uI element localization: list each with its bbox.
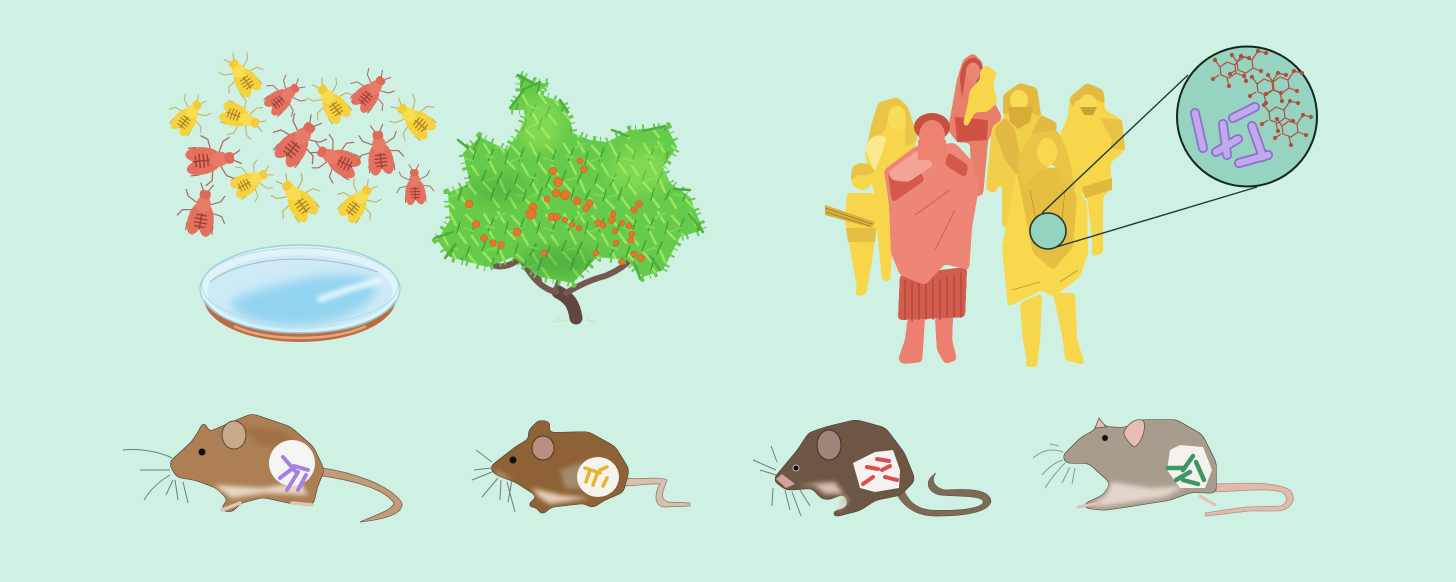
body	[1062, 418, 1216, 510]
whiskers	[123, 449, 188, 503]
person: front woman in yellow	[1002, 130, 1088, 367]
belly shading	[1090, 482, 1185, 506]
peach tree	[430, 70, 710, 322]
panel: human group	[825, 53, 1125, 367]
molecules	[1212, 50, 1312, 146]
eye	[1102, 435, 1108, 441]
tail	[625, 478, 690, 507]
whiskers	[472, 450, 515, 512]
whiskers	[1033, 444, 1075, 488]
gut patch	[853, 450, 900, 492]
tail	[1205, 483, 1293, 516]
tail	[322, 468, 402, 522]
zoom lines	[1042, 75, 1257, 248]
mouse 2	[472, 420, 690, 517]
gut patch	[577, 457, 619, 497]
tree trunk and branches	[496, 255, 632, 318]
person: bearded man	[986, 83, 1057, 227]
eye	[510, 456, 516, 464]
mouse 3	[753, 420, 991, 517]
petri dish	[200, 245, 400, 342]
person: man with curly hair	[1059, 83, 1125, 257]
feet	[1078, 496, 1215, 507]
ear	[817, 430, 841, 460]
person: front woman in red robe	[884, 113, 979, 364]
feet	[222, 503, 312, 510]
bacteria	[585, 467, 607, 486]
body	[773, 420, 915, 517]
magnified microbiome circle	[1177, 46, 1317, 186]
panel: fruit flies swarm	[160, 44, 446, 241]
tail	[896, 473, 991, 516]
nose	[776, 474, 795, 488]
belly and flank shading	[495, 470, 590, 504]
person: back-left woman	[865, 97, 918, 282]
canopy fringe	[437, 75, 703, 283]
bacteria	[863, 459, 897, 484]
peaches	[465, 158, 645, 265]
small gut circle	[1030, 213, 1066, 249]
gut patch	[269, 440, 315, 486]
body	[169, 414, 324, 512]
belly and back shading	[214, 482, 308, 498]
eye	[793, 465, 799, 471]
grass	[552, 313, 596, 322]
bacteria	[1168, 456, 1204, 484]
mouse 4	[1033, 418, 1293, 516]
person: woman with baby in red	[948, 53, 1002, 197]
mouse 1	[123, 414, 402, 522]
bacteria	[1195, 107, 1268, 163]
canopy leaf texture	[440, 79, 700, 279]
gut patch	[1167, 445, 1212, 488]
person: child with bundle	[825, 163, 877, 296]
leaf tips	[435, 75, 703, 278]
ear	[532, 436, 554, 460]
illustration canvas	[123, 46, 1318, 522]
whiskers	[753, 446, 810, 516]
ear	[222, 421, 246, 449]
eye	[198, 448, 206, 456]
body	[489, 420, 629, 517]
belly shading	[798, 482, 848, 513]
ears	[1095, 418, 1144, 447]
bacteria	[280, 457, 308, 490]
